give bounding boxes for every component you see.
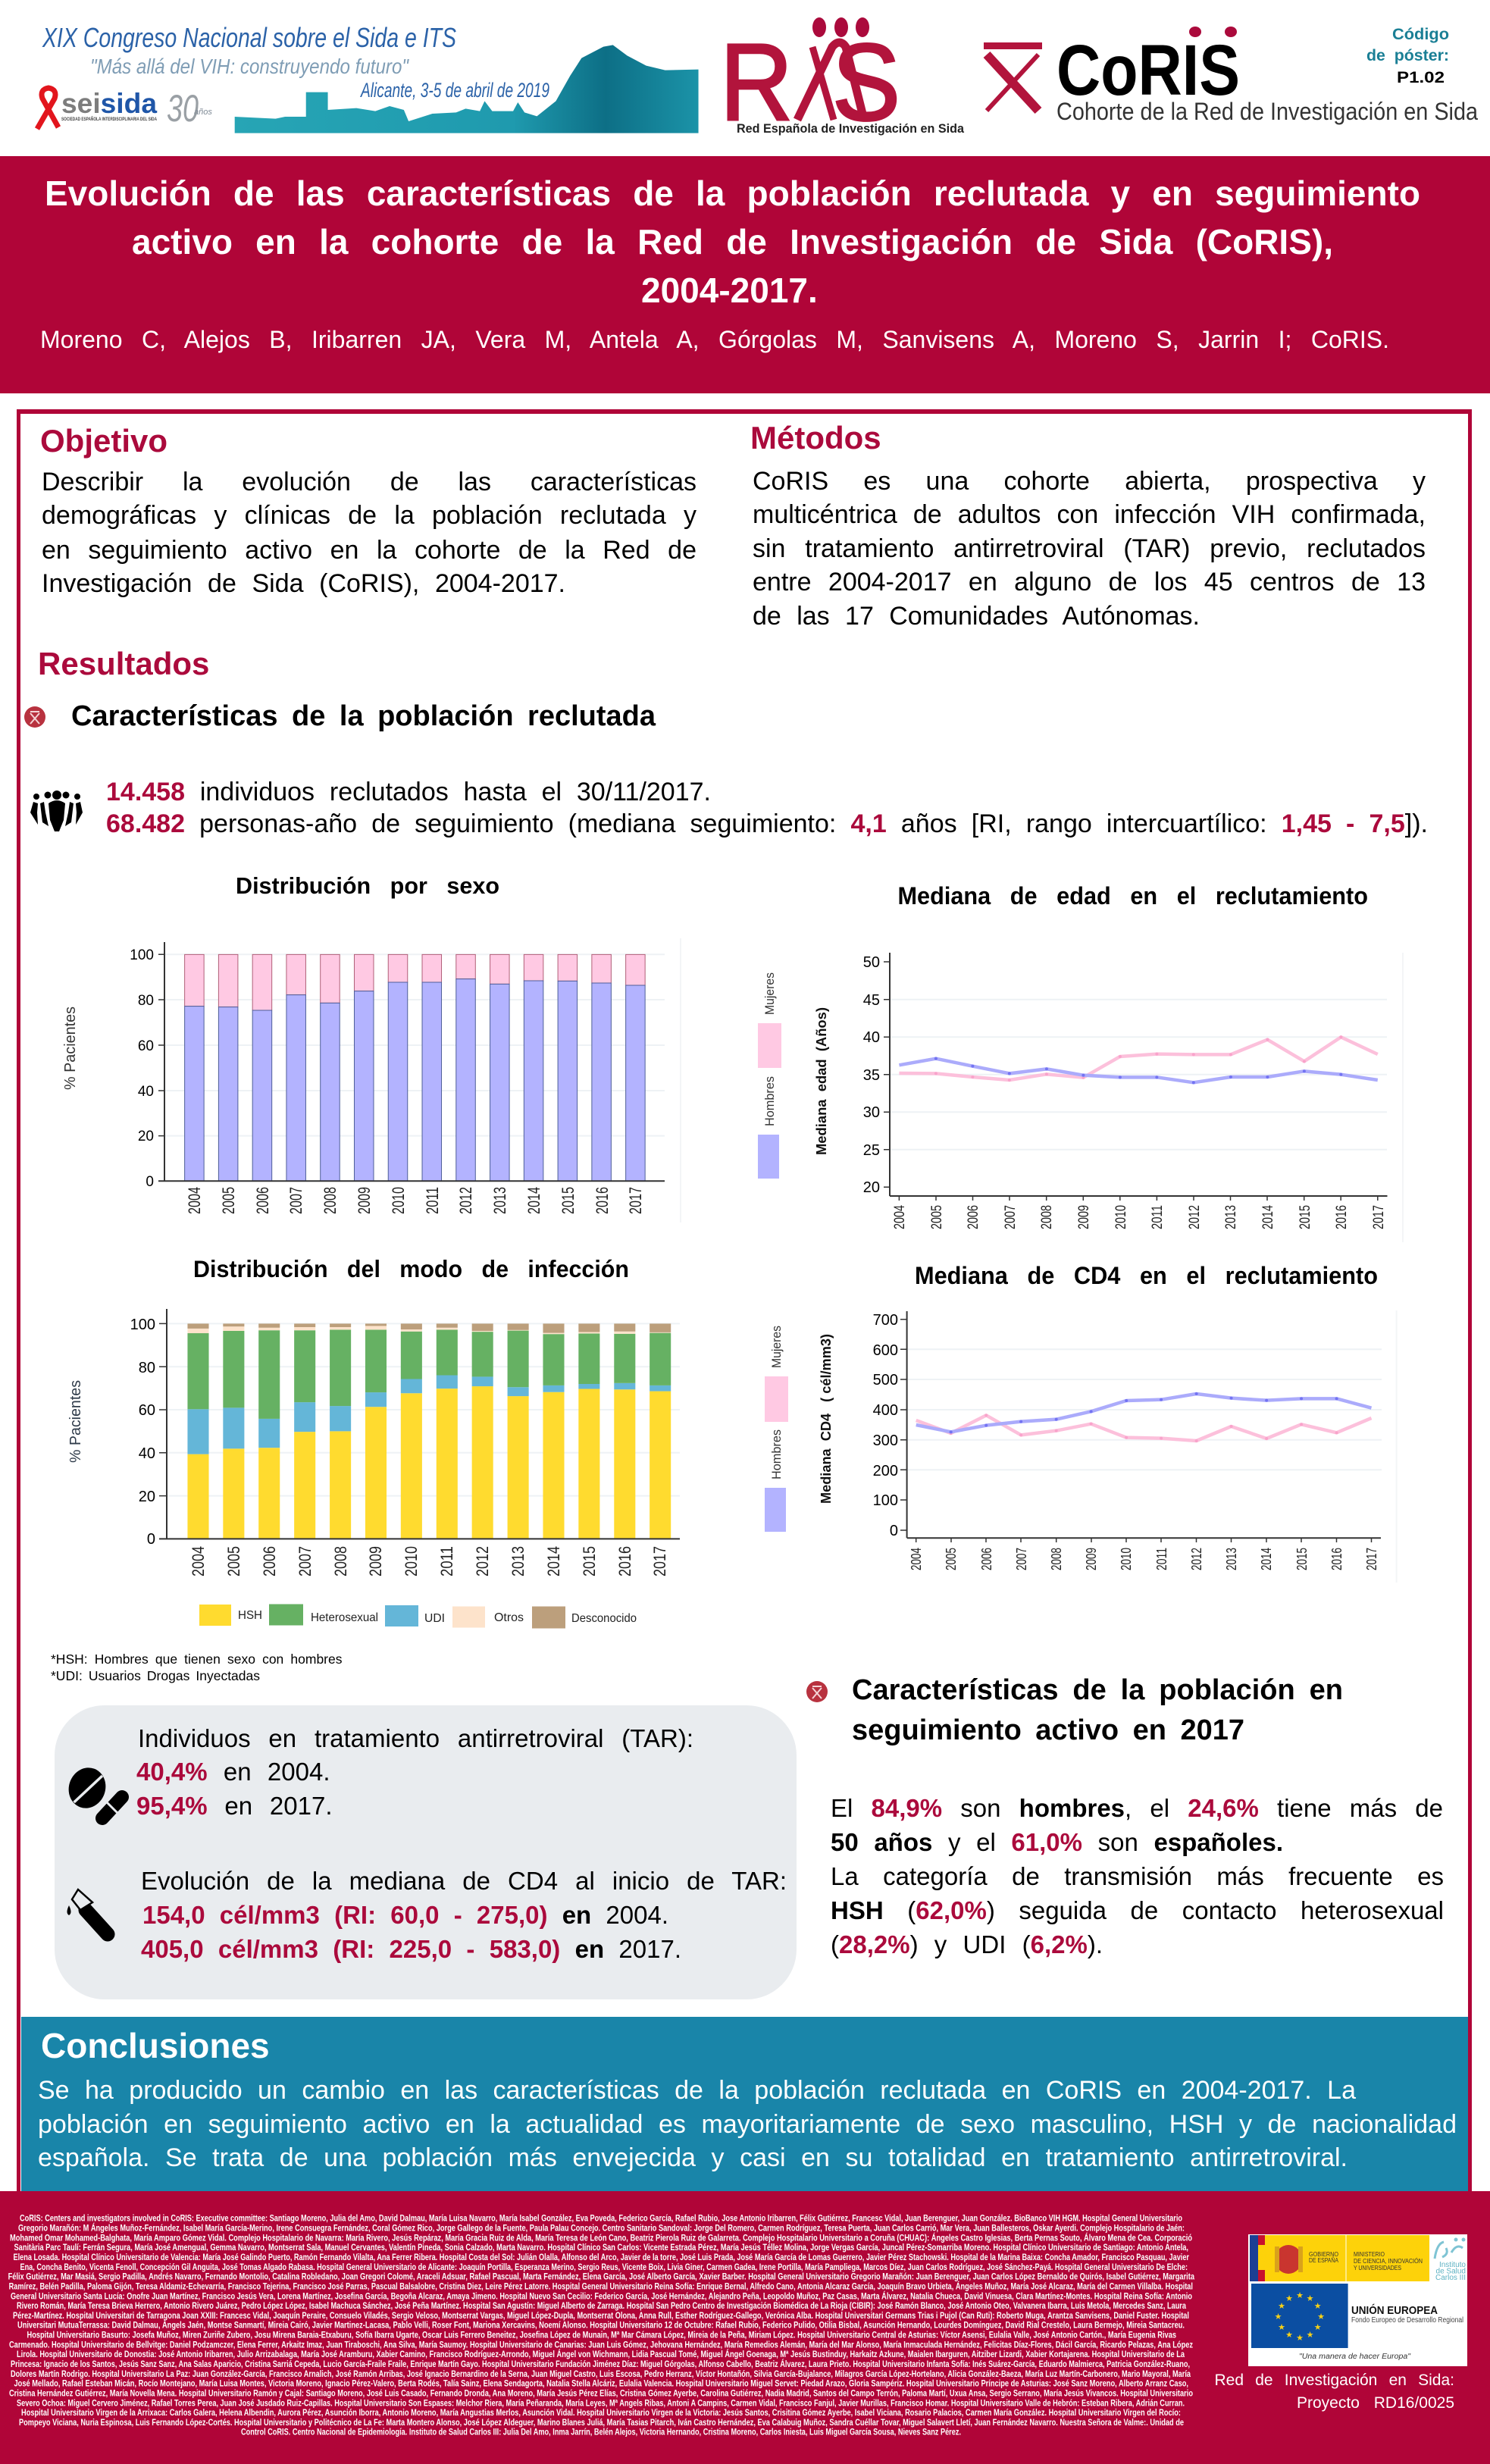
logo: union europea bbox=[1251, 2284, 1463, 2361]
y axis labels: 45 bbox=[863, 992, 880, 1009]
x axis labels: 2009 bbox=[366, 1546, 385, 1576]
x axis labels: 2004 bbox=[909, 1548, 924, 1570]
x axis labels: 2011 bbox=[1154, 1548, 1169, 1570]
y axis labels: 20 bbox=[863, 1179, 880, 1196]
chart title: Mediana de CD4 en el reclutamiento bbox=[915, 1262, 1378, 1289]
CD4 text: Evolución de la mediana de CD4 al inicio de TAR: bbox=[141, 1867, 787, 1895]
y axis labels: 80 bbox=[139, 1360, 155, 1376]
y axis labels: 700 bbox=[873, 1312, 898, 1329]
logo: union europea: ★ bbox=[1285, 2293, 1293, 2303]
poster title: activo en la cohorte de la Red de Investigación de Sida (CoRIS), bbox=[132, 222, 1333, 261]
x axis labels: 2014 bbox=[524, 1187, 543, 1214]
legend: mujeres bbox=[765, 1326, 788, 1422]
y axis labels: 0 bbox=[146, 1174, 154, 1190]
methods text: sin tratamiento antirretroviral (TAR) previo, reclutados bbox=[753, 534, 1426, 563]
logo: seisida: seisida bbox=[61, 88, 157, 119]
objective text: Investigación de Sida (CoRIS), 2004-2017. bbox=[42, 569, 565, 598]
objective text: Describir la evolución de las características bbox=[42, 468, 696, 496]
x axis labels: 2005 bbox=[944, 1548, 959, 1570]
footer investigators text: Hospital Universitario Virgen de la Arrixaca: Carlos Galera, Helena Albendin, Aurora Pérez, Asunción Iborra, Antonio Moreno, María Angustias Merlos, Asunción Vidal. Hospital Universitario Virgen de la Victoria: Jesús Santos, Crisitina Gómez Ayerbe, Isabel Viciana, Rosario Palacios, Carmen María González. Hospital Universitario Virgen del Rocío: bbox=[21, 2407, 1181, 2418]
x axis labels: 2007 bbox=[1003, 1205, 1019, 1229]
logo: union europea: ★ bbox=[1307, 2293, 1314, 2303]
footer investigators text: Hospital Universitario Basurto: Josefa Muñoz, Miren Zuriñe Zubero, Josu Mirena Baraia-Etxaburu, Sofía Ibarra Ugarte, Oscar Luis Ferrero Beneitez, Josefina López de Munain, Mª Mar Cámara López, Mireia de la Peña, Miriam López. Hospital Universitario Central de Asturias: Víctor Asensi, Eulalia Valle, José Antonio Cartón., María Eugenia Rivas bbox=[27, 2330, 1176, 2340]
heading: objetivo: Objetivo bbox=[40, 423, 167, 459]
x axis labels: 2012 bbox=[1189, 1548, 1204, 1570]
legend: Heterosexual bbox=[311, 1611, 378, 1624]
x axis labels: 2007 bbox=[1014, 1548, 1029, 1570]
x axis labels: 2016 bbox=[1329, 1548, 1344, 1570]
y axis labels: 0 bbox=[890, 1523, 898, 1539]
x axis labels: 2013 bbox=[1223, 1205, 1239, 1229]
y axis labels: 50 bbox=[863, 954, 880, 971]
series: HSH bbox=[187, 1386, 671, 1539]
y axis labels: 200 bbox=[873, 1463, 898, 1479]
x axis labels: 2014 bbox=[544, 1546, 563, 1576]
line: hombres bbox=[916, 1394, 1371, 1432]
bars: hombres bbox=[185, 979, 645, 1181]
panel: metodos bbox=[750, 420, 1426, 631]
chart title: Distribución del modo de infección bbox=[193, 1255, 629, 1282]
footer investigators text: Pompeyo Viciana, Nuria Espinosa, Luis Fernando López-Cortés. Hospital Universitario y Politécnico de La Fe: Marta Montero Alonso, José López Aldeguer, Marino Blanes Juliá, María Tasias Pitarch, Iván Castro Hernández, Eva Calabuig Muñoz, Sandra Cuéllar Tovar, Miguel Salavert Lletí, Juan Fernández Navarro. Nuestra Señora de Valme:. Unidad de bbox=[19, 2417, 1184, 2428]
logo: union europea: "Una manera de hacer Europa" bbox=[1299, 2353, 1410, 2361]
logo: RIS bbox=[720, 17, 965, 143]
y axis title: % Pacientes bbox=[62, 1007, 79, 1090]
CD4 text bbox=[141, 1867, 787, 1963]
header logos band bbox=[35, 17, 1478, 143]
heading: resultados: Resultados bbox=[38, 646, 209, 681]
logo: seisida: años bbox=[194, 108, 212, 117]
CD4 text: 405,0 cél/mm3 (RI: 225,0 - 583,0) en 2017. bbox=[141, 1935, 681, 1963]
congress date: Alicante, 3-5 de abril de 2019 bbox=[360, 79, 549, 102]
line: mujeres bbox=[916, 1415, 1371, 1441]
legend: hombres bbox=[765, 1429, 786, 1532]
y axis labels: 600 bbox=[873, 1342, 898, 1359]
logo: RIS: S bbox=[832, 21, 900, 143]
x axis labels bbox=[189, 1546, 669, 1576]
footnotes: *UDI: Usuarios Drogas Inyectadas bbox=[51, 1668, 260, 1683]
chart: mediana de edad bbox=[758, 882, 1404, 1242]
main frame bbox=[17, 409, 1472, 2191]
y axis labels bbox=[873, 1312, 898, 1539]
footer band bbox=[0, 2191, 1490, 2464]
y axis labels: 100 bbox=[130, 1317, 155, 1333]
icon: pills bbox=[63, 1762, 122, 1818]
icon: coris bullet bbox=[24, 706, 45, 728]
objective text: demográficas y clínicas de la población reclutada y bbox=[42, 501, 696, 530]
series: Heterosexual bbox=[187, 1329, 671, 1419]
logo: union europea: ★ bbox=[1314, 2301, 1322, 2311]
y axis labels: 500 bbox=[873, 1372, 898, 1389]
stats: recruited: 14.458 individuos reclutados hasta el 30/11/2017. bbox=[106, 778, 711, 806]
legend: UDI bbox=[424, 1612, 445, 1625]
logo: seisida: 30 bbox=[167, 87, 199, 130]
legend: mujeres: Mujeres bbox=[762, 972, 777, 1015]
logo: seisida bbox=[37, 87, 212, 130]
legend: HSH bbox=[238, 1609, 262, 1622]
methods text: CoRIS es una cohorte abierta, prospectiva y bbox=[753, 467, 1426, 496]
x axis labels: 2016 bbox=[1334, 1205, 1350, 1229]
funding logos bbox=[1248, 2234, 1467, 2366]
footer investigators text: Gregorio Marañón: M Ángeles Muñoz-Fernández, Isabel María García-Merino, Irene Consuegra Fernández, Coral Gómez Rico, Jorge Gallego de la Fuente, Paula Palau Concejo. Centro Sanitario Sandoval: Jorge Del Romero, Carmen Rodríguez, Teresa Puerta, Juan Carlos Carrió, Mar Vera, Juan Ballesteros, Oskar Ayerdi. Complejo Hospitalario de Jaén: bbox=[18, 2222, 1185, 2233]
logo: instituto de salud carlos III: Carlos III bbox=[1435, 2274, 1466, 2282]
line: mujeres bbox=[899, 1037, 1378, 1080]
legend: hombres bbox=[758, 1076, 779, 1179]
x axis labels: 2017 bbox=[626, 1187, 645, 1214]
TAR text: 40,4% en 2004. bbox=[136, 1758, 330, 1786]
x axis labels: 2015 bbox=[559, 1187, 578, 1214]
x axis labels: 2008 bbox=[1039, 1205, 1055, 1229]
y axis labels: 30 bbox=[863, 1104, 880, 1121]
footnotes: *HSH: Hombres que tienen sexo con hombres bbox=[51, 1652, 343, 1667]
logo: gobierno de espana: DE CIENCIA, INNOVACIÓN bbox=[1354, 2258, 1423, 2265]
x axis labels: 2013 bbox=[490, 1187, 509, 1214]
x axis labels: 2008 bbox=[1049, 1548, 1064, 1570]
heading: metodos: Métodos bbox=[750, 420, 881, 456]
bars: mujeres bbox=[185, 954, 645, 1010]
x axis labels: 2005 bbox=[219, 1187, 238, 1214]
legend: Desconocido bbox=[571, 1612, 637, 1625]
logo: union europea: ★ bbox=[1285, 2330, 1293, 2340]
x axis labels: 2012 bbox=[456, 1187, 475, 1214]
x axis labels: 2004 bbox=[892, 1205, 908, 1229]
chart title: Distribución por sexo bbox=[236, 872, 499, 899]
follow-up text: El 84,9% son hombres, el 24,6% tiene más de bbox=[831, 1794, 1443, 1822]
icon: people bbox=[30, 791, 83, 831]
y axis labels: 80 bbox=[138, 993, 154, 1009]
logo: union europea: ★ bbox=[1275, 2312, 1282, 2322]
conclusions text: Se ha producido un cambio en las características de la población reclutada en CoRIS en 2004-2017. La bbox=[38, 2076, 1356, 2105]
x axis labels: 2006 bbox=[260, 1546, 279, 1576]
x axis labels: 2011 bbox=[1150, 1205, 1166, 1229]
poster title bbox=[45, 174, 1420, 310]
logo: gobierno de espana: DE ESPAÑA bbox=[1309, 2257, 1339, 2264]
logo: union europea: ★ bbox=[1317, 2312, 1325, 2322]
y axis labels: 20 bbox=[138, 1129, 154, 1144]
congress title: XIX Congreso Nacional sobre el Sida e ITS bbox=[42, 22, 456, 53]
x axis labels: 2010 bbox=[402, 1546, 421, 1576]
logo: gobierno de espana: GOBIERNO bbox=[1309, 2251, 1338, 2258]
poster code: Código bbox=[1392, 26, 1449, 43]
logo: CoRIS: CoRIS bbox=[1056, 30, 1240, 111]
footer investigators text: José Mellado, Rafael Esteban Micán, Rocío Montejano, María Luisa Montes, Victoria Moreno, Ignacio Pérez-Valero, Berta Rodés, Talía Sainz, Elena Sendagorta, Natalia Stella Alcáriz, Eulalia Valencia. Hospital Universitario Miguel Servet: Piedad Arazo, Gloria Sampériz. Hospital Universitario Príncipe de Asturias: José Sanz Moreno, Alberto Arranz Caso, bbox=[14, 2378, 1188, 2389]
y axis labels bbox=[863, 954, 880, 1196]
x axis labels: 2006 bbox=[253, 1187, 272, 1214]
poster code: P1.02 bbox=[1397, 69, 1445, 86]
follow-up text: 50 años y el 61,0% son españoles. bbox=[831, 1828, 1283, 1856]
congress skyline image bbox=[235, 45, 699, 133]
x axis labels: 2013 bbox=[509, 1546, 527, 1576]
x axis labels: 2012 bbox=[473, 1546, 492, 1576]
icon: test tube bbox=[67, 1889, 108, 1934]
y axis labels: 400 bbox=[873, 1402, 898, 1419]
x axis labels: 2017 bbox=[650, 1546, 669, 1576]
conclusions text: española. Se trata de una población más envejecida y casi en su totalidad en tratamiento antirretroviral. bbox=[38, 2143, 1348, 2172]
logo: union europea: ★ bbox=[1278, 2301, 1285, 2311]
poster title: Evolución de las características de la población reclutada y en seguimiento bbox=[45, 174, 1420, 213]
y axis labels: 25 bbox=[863, 1142, 880, 1159]
y axis labels: 60 bbox=[138, 1038, 154, 1054]
x axis labels: 2015 bbox=[580, 1546, 599, 1576]
logo: union europea: ★ bbox=[1307, 2330, 1314, 2340]
x axis labels: 2007 bbox=[286, 1187, 305, 1214]
legend: hombres: Hombres bbox=[762, 1076, 777, 1126]
x axis labels: 2015 bbox=[1297, 1205, 1313, 1229]
panel: conclusiones bbox=[21, 2017, 1468, 2191]
logo: union europea: ★ bbox=[1296, 2290, 1304, 2300]
y axis title: % Pacientes bbox=[67, 1380, 84, 1463]
stats: recruited: 68.482 personas-año de seguimiento (mediana seguimiento: 4,1 años [RI, rango intercuartílico: 1,45 - 7,5]). bbox=[106, 809, 1428, 838]
x axis labels: 2009 bbox=[1076, 1205, 1092, 1229]
x axis labels: 2016 bbox=[615, 1546, 634, 1576]
icons: pill and tube bbox=[67, 1767, 129, 1942]
y axis labels: 300 bbox=[873, 1432, 898, 1449]
x axis labels: 2004 bbox=[185, 1187, 204, 1214]
x axis labels: 2012 bbox=[1187, 1205, 1203, 1229]
x axis labels: 2010 bbox=[1119, 1548, 1134, 1570]
CD4 text: 154,0 cél/mm3 (RI: 60,0 - 275,0) en 2004. bbox=[142, 1901, 668, 1929]
poster title: 2004-2017. bbox=[641, 271, 818, 310]
subheading: seguimiento activo: seguimiento activo en 2017 bbox=[852, 1714, 1244, 1746]
chart: mediana de CD4 bbox=[765, 1262, 1398, 1583]
conclusions text: población en seguimiento activo en la actualidad es mayoritariamente de sexo masculino, HSH y de nacionalidad bbox=[38, 2110, 1457, 2139]
x axis labels: 2005 bbox=[224, 1546, 243, 1576]
x axis labels bbox=[909, 1548, 1379, 1570]
TAR text: 95,4% en 2017. bbox=[136, 1792, 332, 1820]
poster code bbox=[1366, 26, 1449, 86]
footer investigators text bbox=[8, 2213, 1194, 2437]
x axis labels: 2006 bbox=[966, 1205, 981, 1229]
logo: instituto de salud carlos III: Instituto bbox=[1439, 2261, 1466, 2269]
footer investigators text: Control CoRIS. Centro Nacional de Epidemiología. Instituto de Salud Carlos III: Julia Del Amo, Inma Jarrín, Belén Alejos, Victoria Hernando, Cristina Moreno, Carlos Iniesta, Luis Miguel García Sousa, Nieves Sanz Pérez. bbox=[241, 2427, 961, 2437]
logo: CoRIS bbox=[984, 27, 1478, 125]
follow-up text: (28,2%) y UDI (6,2%). bbox=[831, 1930, 1103, 1958]
TAR text: Individuos en tratamiento antirretroviral (TAR): bbox=[138, 1724, 693, 1752]
subheading: seguimiento activo bbox=[852, 1674, 1343, 1746]
methods text bbox=[753, 467, 1426, 631]
logo: instituto de salud carlos III: de Salud bbox=[1436, 2268, 1466, 2275]
legend: mujeres: Mujeres bbox=[769, 1326, 784, 1368]
logo: gobierno de espana: MINISTERIO bbox=[1354, 2251, 1385, 2258]
legend: Otros bbox=[494, 1611, 524, 1624]
logo: seisida: SOCIEDAD ESPAÑOLA INTERDISCIPLINARIA DEL SIDA bbox=[61, 117, 158, 122]
project reference: Proyecto RD16/0025 bbox=[1297, 2394, 1454, 2412]
series: Otros bbox=[187, 1326, 671, 1334]
logo: RIS: Red Española de Investigación en Sida bbox=[737, 121, 965, 136]
project reference: Red de Investigación en Sida: bbox=[1214, 2372, 1454, 2389]
title banner bbox=[0, 156, 1490, 393]
methods text: entre 2004-2017 en alguno de los 45 centros de 13 bbox=[753, 568, 1426, 596]
conclusions text bbox=[38, 2076, 1457, 2172]
panel: objetivo bbox=[40, 423, 696, 598]
authors: Moreno C, Alejos B, Iribarren JA, Vera M, Antela A, Górgolas M, Sanvisens A, Moreno S, Jarrin I; CoRIS. bbox=[40, 326, 1389, 353]
follow-up text: HSH (62,0%) seguida de contacto heterosexual bbox=[831, 1896, 1444, 1924]
y axis title: Mediana edad (Años) bbox=[814, 1007, 829, 1155]
logo: RIS: R bbox=[720, 21, 793, 143]
logo: gobierno de espana: Y UNIVERSIDADES bbox=[1354, 2265, 1401, 2271]
y axis labels: 40 bbox=[863, 1029, 880, 1046]
legend: hombres: Hombres bbox=[769, 1429, 784, 1479]
objective text bbox=[42, 468, 696, 598]
y axis labels: 40 bbox=[139, 1445, 155, 1462]
x axis labels: 2017 bbox=[1364, 1548, 1379, 1570]
methods text: multicéntrica de adultos con infección VIH confirmada, bbox=[753, 500, 1426, 529]
chart: distribucion por sexo bbox=[62, 872, 681, 1223]
legend bbox=[199, 1604, 637, 1628]
logo: union europea: ★ bbox=[1314, 2322, 1322, 2332]
y axis labels: 100 bbox=[130, 947, 154, 963]
x axis labels bbox=[185, 1187, 645, 1214]
x axis labels: 2014 bbox=[1260, 1205, 1276, 1229]
x axis labels: 2010 bbox=[389, 1187, 408, 1214]
methods text: de las 17 Comunidades Autónomas. bbox=[753, 602, 1200, 631]
y axis labels bbox=[130, 947, 154, 1190]
x axis labels: 2011 bbox=[437, 1546, 456, 1576]
poster code: de póster: bbox=[1366, 47, 1449, 64]
subheading: poblacion reclutada: Características de la población reclutada bbox=[71, 700, 656, 732]
follow-up text: La categoría de transmisión más frecuente es bbox=[831, 1862, 1444, 1890]
footer investigators text: Lirola. Hospital Universitario de Donostia: José Antonio Iribarren, Julio Arrizabalaga, María José Aramburu, Xabier Camino, Francisco Rodríguez-Arrondo, Miguel Ángel von Wichmann, Lidia Pascual Tomé, Miguel Ángel Goenaga, Mª Jesús Bustinduy, Harkaitz Azkune, Maialen Ibarguren, Aitziber Lizardi, Xabier Kortajarena. Hospital Universitario de La bbox=[17, 2348, 1185, 2359]
series: Desconocido bbox=[187, 1323, 671, 1333]
x axis labels: 2008 bbox=[331, 1546, 350, 1576]
footer investigators text: Universitari MutuaTerrassa: David Dalmau, Àngels Jaén, Montse Sanmartí, Mireia Cairó, Javier Martinez-Lacasa, Pablo Velli, Roser Font, Mariona Xercavins, Noemí Alonso. Hospital Universitario 12 de Octubre: Rafael Rubio, Federico Pulido, Otilia Bisbal, Asunción Hernando, Lourdes Domínguez, David Rial Crestelo, Laura Bermejo, Mireia Santacreu. bbox=[17, 2319, 1185, 2331]
x axis labels: 2015 bbox=[1294, 1548, 1310, 1570]
y axis labels: 40 bbox=[138, 1084, 154, 1100]
legend: mujeres bbox=[758, 972, 781, 1068]
x axis labels: 2013 bbox=[1224, 1548, 1239, 1570]
stacked bars bbox=[187, 1323, 671, 1539]
x axis labels: 2016 bbox=[593, 1187, 612, 1214]
logo: union europea: UNIÓN EUROPEA bbox=[1351, 2303, 1438, 2317]
x axis labels: 2006 bbox=[979, 1548, 994, 1570]
y axis labels: 100 bbox=[873, 1492, 898, 1509]
line: hombres bbox=[899, 1059, 1378, 1082]
x axis labels: 2014 bbox=[1259, 1548, 1274, 1570]
footnotes bbox=[51, 1652, 343, 1683]
x axis labels: 2010 bbox=[1113, 1205, 1129, 1229]
panel: TAR y CD4 bbox=[55, 1705, 797, 1999]
series: UDI bbox=[187, 1376, 671, 1454]
logo: union europea: Fondo Europeo de Desarrollo Regional bbox=[1351, 2316, 1463, 2325]
stats: recruited bbox=[106, 778, 1428, 838]
heading: conclusiones: Conclusiones bbox=[41, 2026, 270, 2065]
congress motto: "Más allá del VIH: construyendo futuro" bbox=[90, 55, 409, 78]
congress banner bbox=[42, 22, 699, 133]
x axis labels: 2009 bbox=[355, 1187, 374, 1214]
y axis labels: 60 bbox=[139, 1402, 155, 1419]
objective text: en seguimiento activo en la cohorte de la Red de bbox=[42, 536, 696, 565]
project reference bbox=[1213, 2369, 1457, 2414]
logo: instituto de salud carlos III bbox=[1435, 2237, 1466, 2282]
y axis labels: 35 bbox=[863, 1067, 880, 1084]
x axis labels: 2004 bbox=[189, 1546, 208, 1576]
x axis labels: 2007 bbox=[296, 1546, 315, 1576]
y axis labels: 20 bbox=[139, 1489, 155, 1505]
x axis labels: 2005 bbox=[929, 1205, 945, 1229]
y axis title: Mediana CD4 ( cél/mm3) bbox=[819, 1334, 834, 1504]
logo: union europea: ★ bbox=[1278, 2322, 1285, 2332]
chart title: Mediana de edad en el reclutamiento bbox=[897, 882, 1368, 910]
x axis labels: 2017 bbox=[1371, 1205, 1387, 1229]
chart: distribucion del modo de infeccion bbox=[67, 1255, 680, 1628]
x axis labels: 2008 bbox=[321, 1187, 340, 1214]
follow-up text bbox=[831, 1794, 1444, 1958]
y axis labels bbox=[130, 1317, 155, 1548]
TAR text bbox=[136, 1724, 693, 1820]
icon: coris bullet bbox=[806, 1681, 828, 1702]
logo: gobierno de espana bbox=[1250, 2235, 1429, 2281]
logo: union europea: ★ bbox=[1296, 2333, 1304, 2343]
x axis labels bbox=[892, 1205, 1387, 1229]
y axis labels: 0 bbox=[147, 1531, 155, 1548]
x axis labels: 2009 bbox=[1084, 1548, 1099, 1570]
x axis labels: 2011 bbox=[423, 1187, 442, 1214]
subheading: seguimiento activo: Características de la población en bbox=[852, 1674, 1343, 1706]
